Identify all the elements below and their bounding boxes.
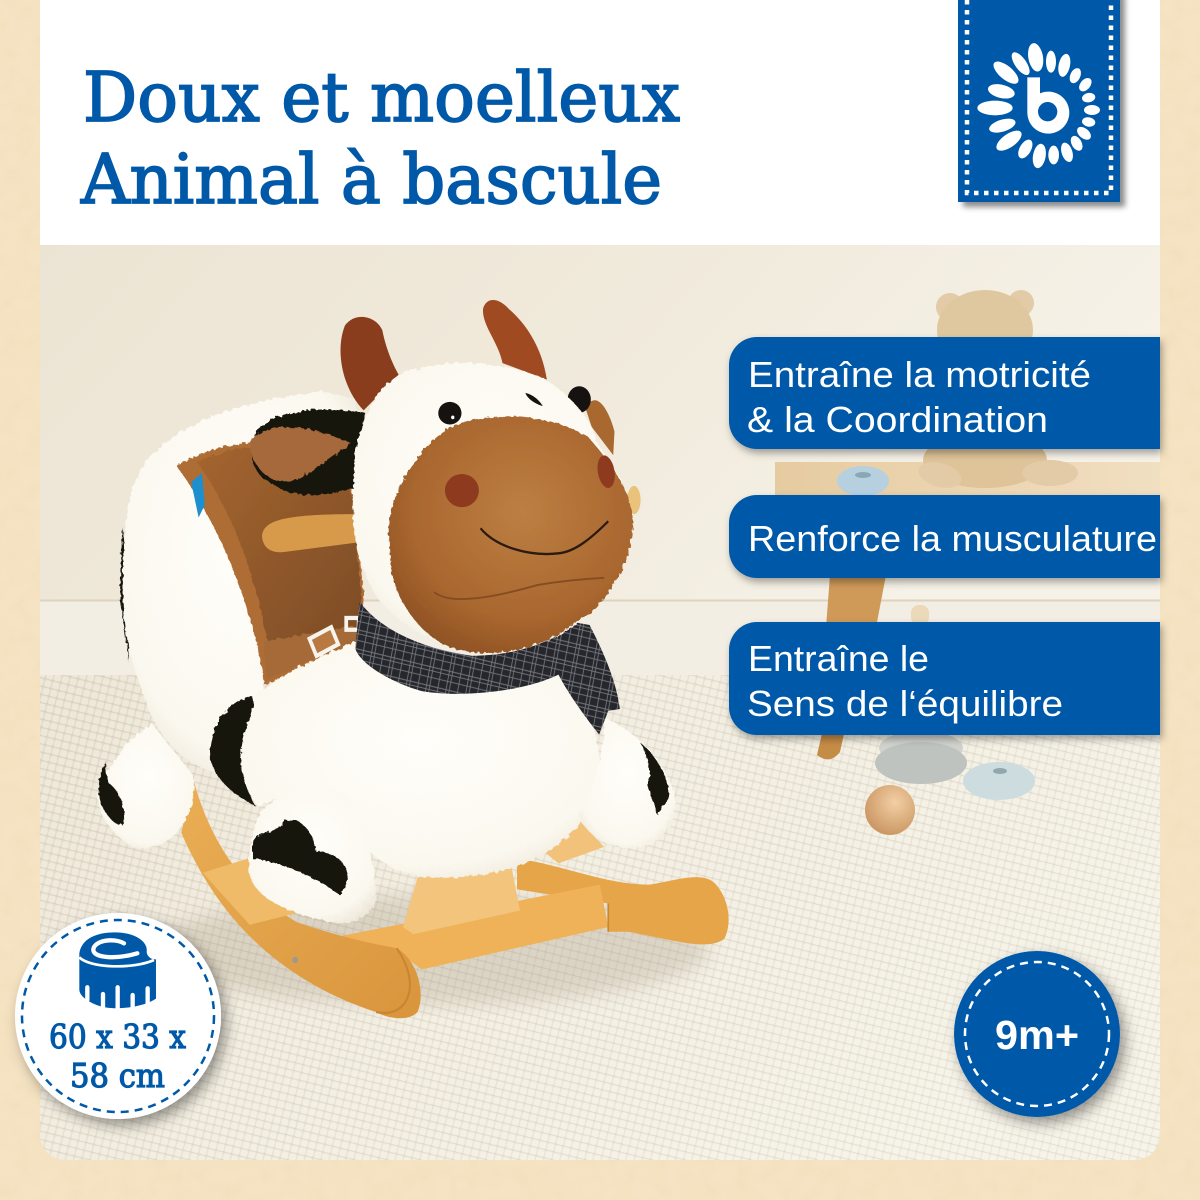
harness buckle [309, 618, 359, 656]
benefit pill: équilibre [729, 622, 1160, 735]
dimensions badge: 60 x 33 x [49, 1017, 186, 1056]
head [353, 363, 627, 653]
benefit pill: équilibre: Entraîne le [748, 638, 929, 679]
benefit pill: équilibre: Sens de l‘équilibre [747, 683, 1063, 724]
front left leg [249, 787, 376, 923]
right ear [568, 386, 614, 455]
back left leg [98, 724, 194, 849]
brown muzzle [389, 416, 633, 653]
benefit pill: musculature [729, 495, 1160, 578]
header panel [40, 0, 1160, 245]
horns [341, 300, 547, 410]
benefit pill: motricité: & la Coordination [747, 399, 1048, 440]
benefit pill: motricité: Entraîne la motricité [748, 354, 1091, 395]
wooden rocker base [181, 781, 729, 1018]
benefit pill: motricité [729, 337, 1160, 449]
age badge: 9m+ [995, 1012, 1079, 1058]
icon: measuring tape [79, 932, 156, 1010]
left ear [250, 409, 366, 495]
brand logo tag [958, 0, 1120, 202]
photo panel: nursery scene [40, 245, 1160, 1160]
blue seat label [191, 473, 205, 517]
shelf table [775, 462, 1160, 759]
smile [434, 521, 608, 599]
flank black patch [210, 696, 256, 807]
nostrils [445, 454, 617, 507]
front right leg [579, 717, 675, 849]
title [80, 59, 680, 220]
title: Animal à bascule [80, 141, 662, 220]
seat shell [120, 391, 364, 773]
right handle tip [627, 486, 641, 514]
plaid scarf [355, 601, 620, 735]
stacking rings and ball [837, 466, 1035, 835]
dimensions badge [15, 913, 221, 1119]
age badge [954, 951, 1120, 1117]
eyes [438, 393, 543, 424]
rocking cow toy [98, 300, 729, 1018]
dimensions badge: 58 cm [70, 1056, 165, 1095]
body [240, 639, 599, 878]
title: Doux et moelleux [83, 59, 680, 138]
teddy bear [916, 290, 1078, 492]
benefit pill: musculature: Renforce la musculature [748, 518, 1157, 559]
wooden handle [262, 514, 357, 552]
